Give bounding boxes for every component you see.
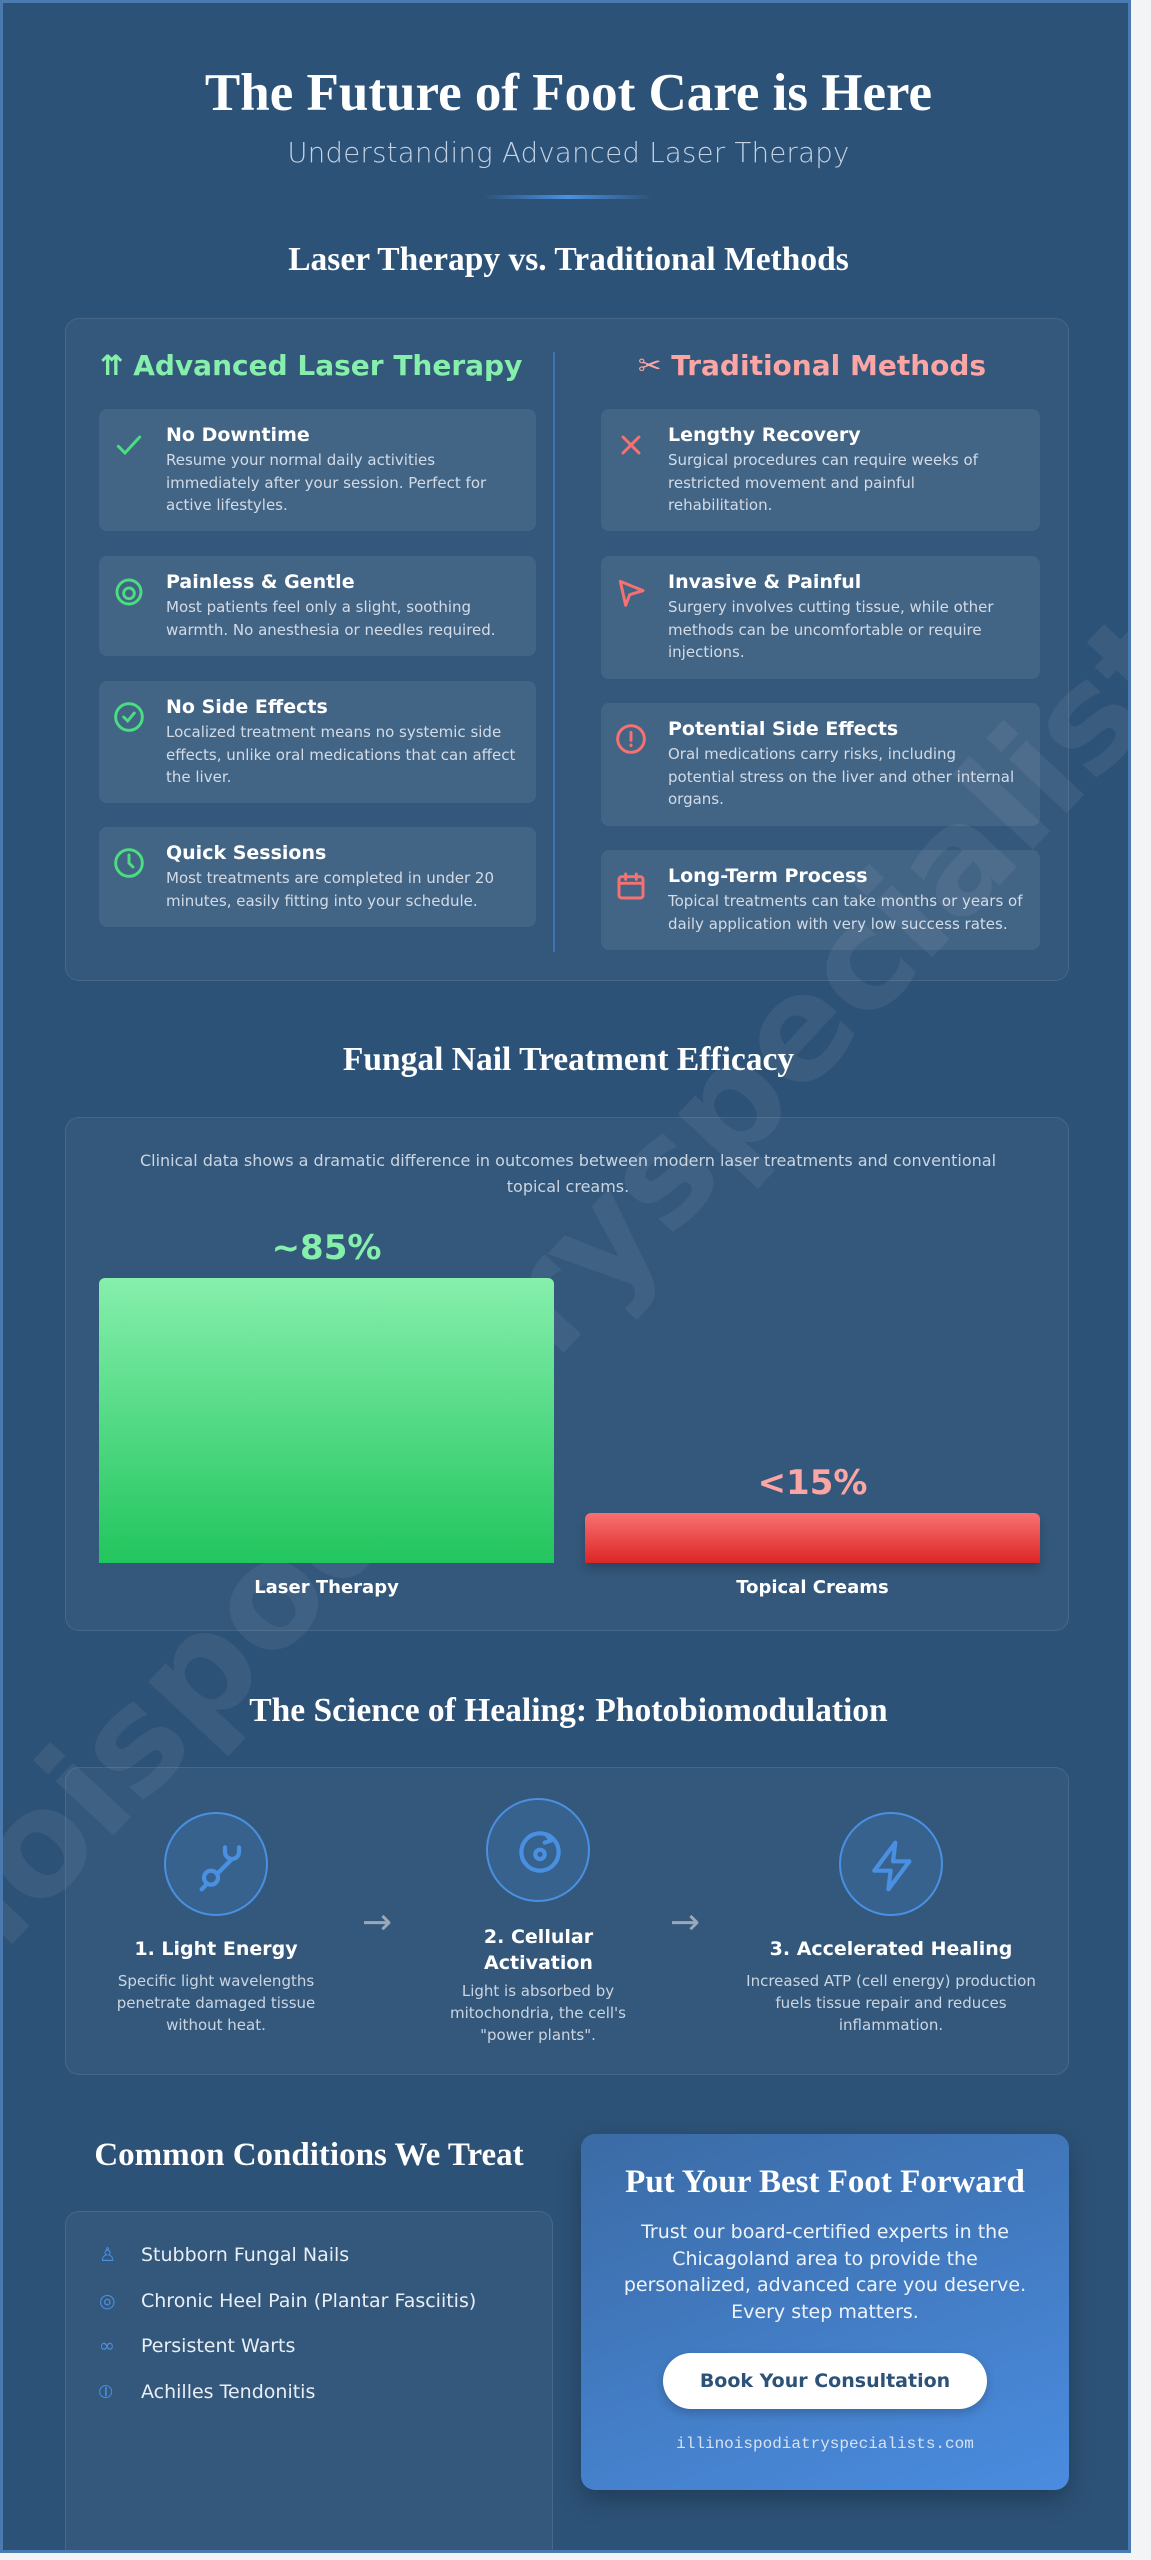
bar: topical (583, 1463, 1042, 1571)
card: painless: Painless & Gentle (166, 571, 355, 593)
step 2: 2. Cellular (484, 1926, 593, 1948)
caption: topical creams. (507, 1177, 629, 1196)
item: warts: ∞ (99, 2335, 115, 2357)
step 2: Light is absorbed by mitochondria, the cell's "power plants". (450, 1982, 626, 2044)
column heading: laser: ⇈ Advanced Laser Therapy (100, 349, 522, 382)
card: no side effects (99, 681, 536, 803)
step 1: Specific light wavelengths penetrate damaged tissue without heat. (117, 1972, 315, 2034)
CTA text: Trust our board-certified experts in the Chicagoland area to provide the personalized, advanced care you deserve. Every step matters. (624, 2221, 1026, 2322)
card: no downtime: No Downtime (166, 424, 310, 446)
step 3 (746, 1812, 1036, 2034)
column heading: traditional: ✂ Traditional Methods (638, 349, 986, 382)
panel: science steps (65, 1767, 1069, 2075)
card: no side effects: effects, unlike oral medications that can affect the liver. (166, 746, 515, 786)
card: long-term: Long-Term Process (668, 865, 868, 887)
url: illinoispodiatryspecialists.com (676, 2435, 974, 2453)
title: The Future of Foot Care is Here (205, 64, 932, 122)
CTA title: Put Your Best Foot Forward (625, 2164, 1025, 2200)
card: no downtime (99, 409, 536, 531)
label: laser: Laser Therapy (254, 1577, 399, 1598)
item: heel pain: ◎ (99, 2290, 116, 2312)
card: potential side effects: potential stress on the liver and other internal organs. (668, 768, 1014, 808)
step 3: 3. Accelerated Healing (770, 1938, 1012, 1960)
bar: laser (99, 1228, 554, 1563)
card: no side effects: Localized treatment means no systemic side (166, 723, 501, 741)
label: topical: Topical Creams (736, 1577, 889, 1598)
panel: conditions list (65, 2211, 553, 2560)
card: invasive: Invasive & Painful (668, 571, 861, 593)
card: lengthy recovery (601, 409, 1040, 531)
button (663, 2353, 987, 2409)
card: potential side effects (601, 703, 1040, 826)
item: achilles: Achilles Tendonitis (141, 2381, 315, 2403)
card: invasive: Surgery involves cutting tissue, while other methods can be uncomfortable or require injections. (668, 598, 994, 661)
step 2: Activation (484, 1952, 593, 1974)
card: long-term: Topical treatments can take months or years of daily application with very low success rates. (668, 892, 1023, 932)
bar: topical: <15% (758, 1463, 867, 1503)
card: painless: Most patients feel only a slight, soothing warmth. No anesthesia or needles required. (166, 598, 496, 638)
heading: conditions: Common Conditions We Treat (94, 2137, 524, 2173)
item: fungal nails: Stubborn Fungal Nails (141, 2244, 349, 2266)
arrow 1: → (362, 1902, 392, 1943)
item: achilles: ⦶ (99, 2381, 113, 2403)
caption: Clinical data shows a dramatic difference in outcomes between modern laser treatments and conventional (140, 1151, 996, 1170)
subtitle: Understanding Advanced Laser Therapy (287, 137, 850, 169)
button: Book Your Consultation (700, 2370, 950, 2392)
heading: comparison: Laser Therapy vs. Traditional Methods (288, 241, 849, 278)
step 2 (450, 1798, 626, 2044)
heading: efficacy: Fungal Nail Treatment Efficacy (343, 1041, 794, 1078)
card: quick sessions (99, 827, 536, 927)
CTA card (581, 2134, 1069, 2490)
step 1: 1. Light Energy (134, 1938, 298, 1960)
card: no downtime: Resume your normal daily activities immediately after your session. Perfect for active lifestyles. (166, 451, 486, 514)
heading: science: The Science of Healing: Photobiomodulation (249, 1692, 888, 1729)
card: invasive (601, 556, 1040, 679)
card: quick sessions: Most treatments are completed in under 20 minutes, easily fitting into your schedule. (166, 869, 494, 910)
panel: comparison (65, 318, 1069, 981)
item: warts: Persistent Warts (141, 2335, 295, 2357)
card: potential side effects: Potential Side Effects (668, 718, 898, 740)
bar: laser: ~85% (272, 1228, 381, 1268)
card: quick sessions: Quick Sessions (166, 842, 326, 864)
card: long-term (601, 850, 1040, 950)
item: fungal nails: ♙ (99, 2244, 116, 2266)
accent underline (483, 195, 653, 199)
card: painless (99, 556, 536, 656)
step 1 (117, 1812, 315, 2034)
caption (140, 1151, 996, 1196)
card: lengthy recovery: Lengthy Recovery (668, 424, 861, 446)
panel: efficacy chart (65, 1117, 1069, 1631)
card: lengthy recovery: Surgical procedures can require weeks of restricted movement and painful rehabilitation. (668, 451, 978, 514)
arrow 2: → (670, 1902, 700, 1943)
item: heel pain: Chronic Heel Pain (Plantar Fasciitis) (141, 2290, 476, 2312)
card: no side effects: No Side Effects (166, 696, 328, 718)
step 3: Increased ATP (cell energy) production fuels tissue repair and reduces inflammation. (746, 1972, 1036, 2034)
card: potential side effects: Oral medications carry risks, including (668, 745, 956, 763)
